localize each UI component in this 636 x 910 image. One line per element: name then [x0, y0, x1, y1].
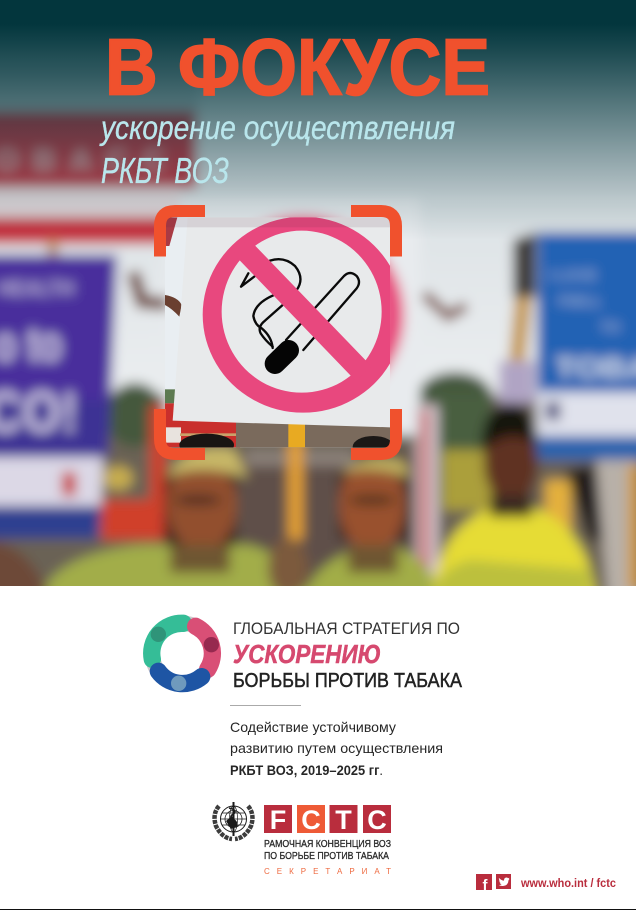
subtitle	[99, 109, 455, 191]
trees	[103, 364, 502, 454]
yellow sign stick	[288, 440, 303, 540]
subtitle: РКБТ ВОЗ	[101, 150, 229, 191]
red lower band	[165, 403, 240, 447]
cigarette	[241, 259, 359, 350]
blurred white sign behind focus frame	[165, 197, 420, 435]
website link: www.who.int / fctc	[520, 878, 617, 890]
FCTC caption	[264, 839, 391, 876]
gravel ground	[236, 420, 390, 447]
tree fragment	[165, 389, 175, 403]
icon: WHO emblem	[215, 802, 252, 839]
right blue sign: TO	[600, 319, 621, 336]
top-left red fragment	[165, 217, 177, 246]
strategy heading: БОРЬБЫ ПРОТИВ ТАБАКА	[233, 670, 463, 692]
brown arms	[133, 272, 168, 304]
person right in yellow	[432, 403, 636, 600]
icon: twitter	[496, 874, 511, 889]
red and white stripe pole	[416, 405, 438, 595]
right blue sign	[499, 232, 636, 460]
FCTC logo tiles: T	[335, 805, 352, 835]
hand	[268, 538, 308, 598]
strategy description: РКБТ ВОЗ, 2019–2025 гг.	[230, 762, 383, 778]
strategy description: развитию путем осуществления	[230, 740, 443, 756]
strategy heading: УСКОРЕНИЮ	[233, 639, 381, 669]
person centre right	[300, 458, 445, 600]
sharp focus photo: no smoking sign	[165, 217, 403, 457]
title: В ФОКУСЕ	[105, 22, 490, 112]
FCTC logo tiles: C	[367, 805, 387, 835]
top-left red banner	[0, 100, 204, 265]
hair	[179, 434, 234, 448]
strategy description: Содействие устойчивому	[230, 719, 396, 735]
top shade	[165, 217, 390, 227]
focus frame brackets	[160, 211, 396, 454]
left purple sign: HEALTH	[0, 278, 74, 300]
icon: facebook	[476, 874, 492, 894]
smoke	[241, 259, 300, 290]
FCTC caption: ПО БОРЬБЕ ПРОТИВ ТАБАКА	[264, 851, 389, 862]
strategy heading	[233, 619, 463, 692]
FCTC caption: РАМОЧНАЯ КОНВЕНЦИЯ ВОЗ	[264, 839, 391, 850]
cigarette filter	[275, 350, 289, 364]
white lower panel background	[0, 586, 636, 909]
strategy ring logo	[151, 623, 219, 691]
FCTC logo tiles	[264, 805, 391, 835]
icon: facebook: f	[482, 877, 488, 894]
arm fragment	[165, 295, 182, 317]
FCTC caption: СЕКРЕТАРИАТ	[264, 867, 391, 876]
sign board	[172, 304, 390, 428]
subtitle: ускорение осуществления	[99, 109, 455, 146]
top-left red banner: OBACC	[0, 144, 165, 177]
person left	[0, 448, 415, 600]
diagonal bar	[241, 246, 364, 374]
strategy description	[230, 719, 443, 778]
left purple sign	[0, 255, 117, 539]
dark teal gradient overlay	[0, 0, 636, 240]
right blue sign: FMILL	[558, 293, 602, 310]
FCTC logo tiles: C	[301, 805, 321, 835]
right blue sign: I LOVE	[548, 267, 597, 284]
prohibition ring	[203, 217, 403, 413]
sign stick	[288, 422, 305, 447]
FCTC logo tiles: F	[270, 805, 286, 835]
background photo: blurred protest crowd	[0, 0, 636, 605]
strategy heading: ГЛОБАЛЬНАЯ СТРАТЕГИЯ ПО	[233, 619, 460, 638]
red panel behind person	[101, 405, 166, 540]
